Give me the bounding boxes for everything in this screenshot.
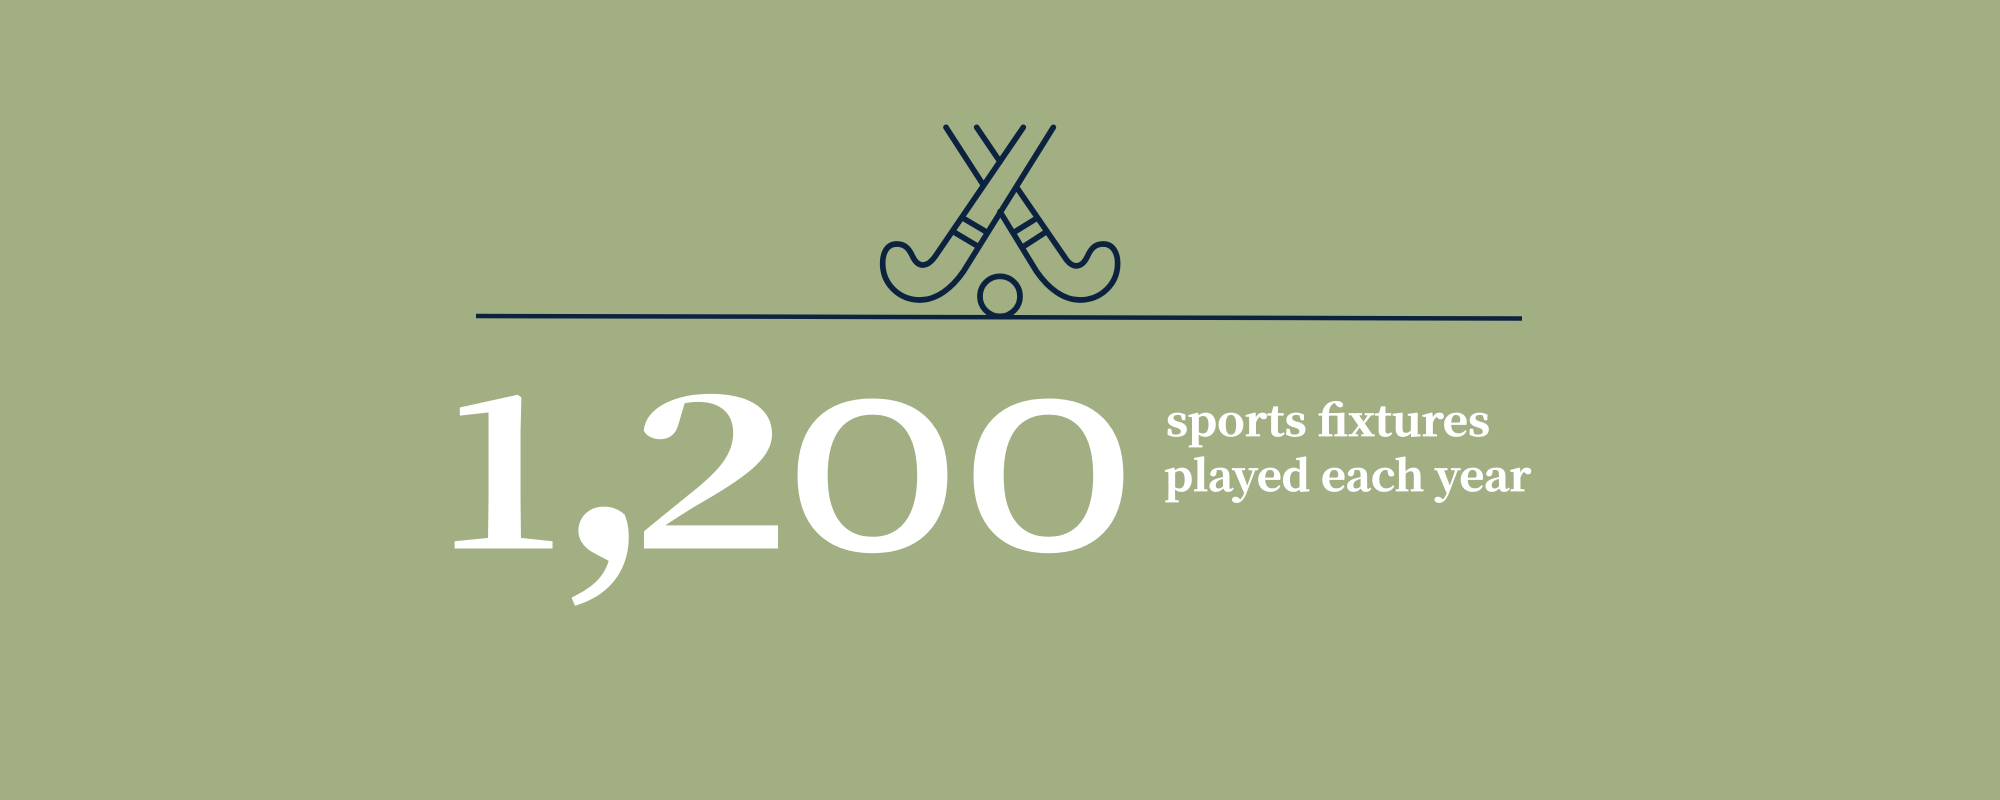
front hockey stick	[883, 127, 1053, 300]
big number: 1,200: 2	[629, 305, 791, 608]
big number: 1,200: 0	[782, 309, 963, 610]
icon: crossed hockey sticks and ball	[883, 127, 1118, 316]
big number: 1,200: 1	[436, 307, 569, 609]
caption text: played each year	[1164, 444, 1531, 504]
big number: 1,200: 0	[958, 309, 1139, 610]
hockey ball	[980, 276, 1020, 316]
caption text	[1164, 389, 1531, 504]
big number: 1,200	[436, 201, 1139, 637]
back hockey stick	[946, 127, 1118, 300]
caption text: sports fixtures	[1166, 389, 1490, 449]
ground line	[476, 316, 1522, 318]
big number: 1,200: ,	[551, 201, 656, 637]
